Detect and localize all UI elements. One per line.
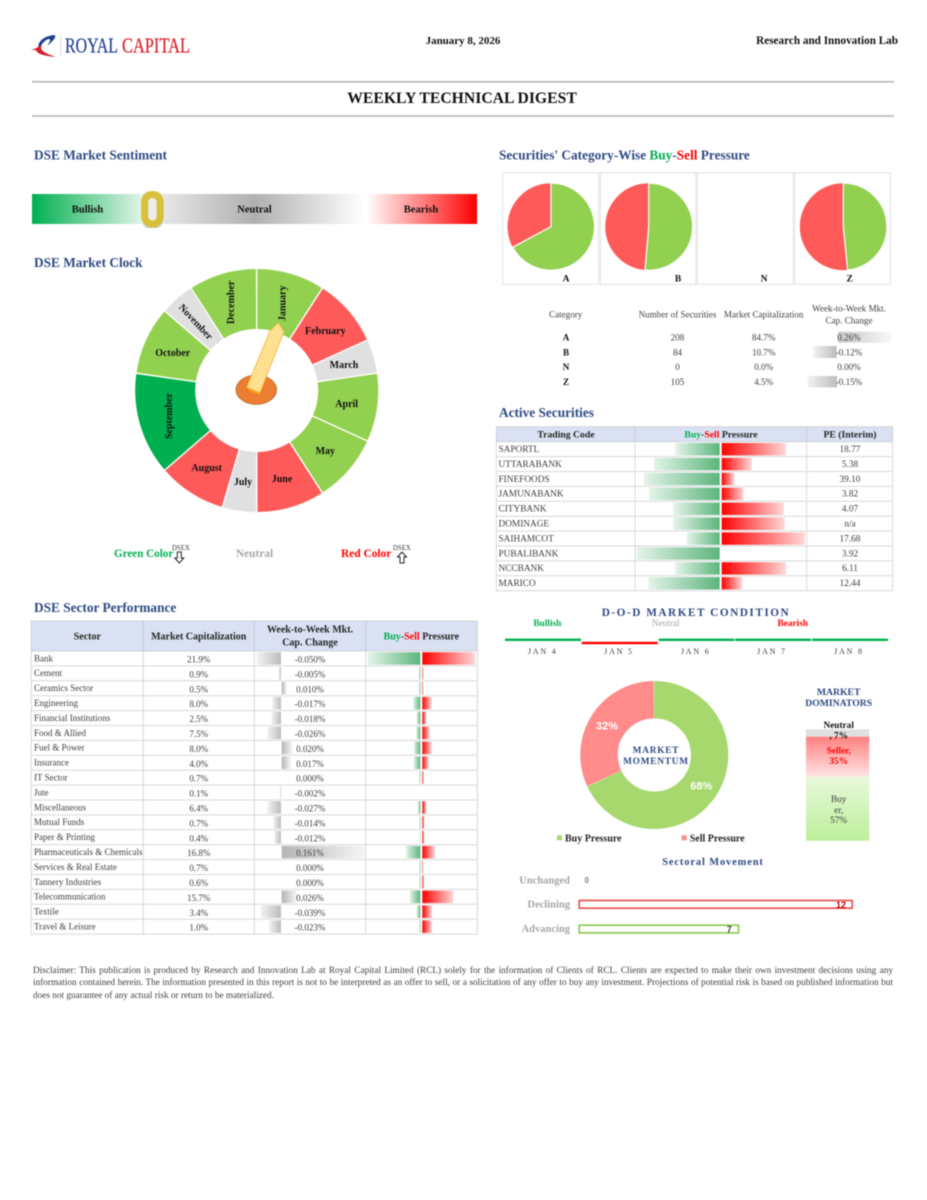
row: UTTARABANK: [498, 458, 858, 470]
month: June: June: [272, 474, 293, 485]
row: Pharmaceuticals & Chemicals: Pharmaceuticals & Chemicals: [34, 847, 143, 857]
month: April: April: [335, 399, 358, 410]
clock hub: [236, 375, 277, 404]
row: MARICO: [498, 577, 861, 590]
chart: market dominators stack: [806, 721, 869, 841]
row: Services & Real Estate: 0.7%: [189, 863, 209, 873]
row: Tannery Industries: Tannery Industries: [34, 877, 102, 887]
row: Miscellaneous: [34, 801, 426, 814]
icon: down arrow: [175, 552, 184, 563]
row: DOMINAGE: n/a: [844, 520, 856, 530]
row: JAMUNABANK: [498, 488, 858, 500]
chart: sectoral movement: 0: [584, 876, 589, 885]
row: Textile: -0.039%: [295, 908, 326, 918]
timeline: day-on-day condition: Neutral: [652, 619, 680, 629]
disclaimer: [32, 965, 894, 1001]
row: Bank: 21.9%: [187, 654, 211, 664]
row: Bank: Bank: [34, 653, 53, 663]
chart: market clock: [135, 268, 378, 514]
month: April: [165, 299, 358, 482]
disclaimer: information contained herein. The information presented in this report is not to be interpreted as an offer to sell, or a solicitation of any offer to buy any investment. Projections of potential risk is based on published information but: [33, 978, 893, 988]
row: Tannery Industries: 0.6%: [189, 878, 209, 888]
row: Mutual Funds: -0.014%: [295, 818, 326, 828]
row: Insurance: [34, 756, 429, 769]
table: active securities: [496, 427, 893, 591]
legend: clock colours: [114, 545, 411, 563]
month: October: [155, 299, 348, 482]
table: active securities: PE (Interim): [824, 430, 876, 440]
row: IT Sector: IT Sector: [34, 772, 68, 782]
heading: market dominators: DOMINATORS: [805, 698, 872, 709]
row: CITYBANK: CITYBANK: [498, 505, 547, 515]
month: June: [165, 299, 348, 485]
logo: Royal Capital: [31, 34, 190, 58]
table: category summary: 0.00%: [837, 362, 861, 372]
row: SAPORTL: [498, 443, 861, 455]
chart: market dominators stack: 35%: [829, 757, 848, 767]
heading: DSE Market Sentiment: DSE Market Sentiment: [34, 148, 168, 162]
month: March: March: [330, 360, 359, 371]
table: sector performance: Week-to-Week Mkt.: [267, 624, 354, 636]
legend: clock colours: DSEX: [393, 545, 411, 552]
bar: advancing: 7: [727, 924, 732, 934]
row: Financial Institutions: 2.5%: [189, 714, 209, 724]
chart: market dominators stack: , 7%: [829, 732, 848, 742]
timeline: day-on-day condition: Bullish: [533, 619, 562, 629]
row: Telecommunication: Telecommunication: [34, 892, 106, 902]
timeline: day-on-day condition: JAN 6: [681, 647, 711, 656]
row: FINEFOODS: [498, 473, 861, 485]
disclaimer: does not guarantee of any actual risk or return to be materialized.: [33, 990, 274, 1000]
table: sector performance: Cap. Change: [282, 638, 338, 648]
timeline: day-on-day condition: [505, 619, 888, 656]
sentiment gauge: Bearish: [404, 204, 438, 216]
row: Fuel & Power: [34, 742, 432, 754]
timeline: day-on-day condition: Bearish: [777, 619, 809, 629]
row: Miscellaneous: 6.4%: [189, 804, 209, 814]
row: Jute: -0.002%: [295, 789, 326, 799]
row: Food & Allied: -0.026%: [295, 729, 326, 739]
row: Ceramics Sector: 0.5%: [189, 684, 209, 694]
row: Textile: Textile: [34, 907, 59, 917]
logo: Royal Capital: CAPITAL: [122, 34, 190, 58]
row: PUBALIBANK: PUBALIBANK: [498, 549, 559, 559]
row: PUBALIBANK: [498, 547, 858, 560]
table: category summary: 0.26%: [837, 332, 861, 342]
row: Mutual Funds: [34, 816, 424, 829]
sentiment gauge: Bullish: [72, 204, 103, 216]
month: September: September: [164, 392, 175, 439]
row: CITYBANK: [498, 503, 858, 515]
row: Pharmaceuticals & Chemicals: 16.8%: [187, 848, 211, 858]
disclaimer: Disclaimer: This publication is produced by Research and Innovation Lab at Royal Capital Limited (RCL) solely for the information of Clients of RCL. Clients are expected to make their own investment decisions using any: [33, 966, 893, 976]
row: FINEFOODS: 39.10: [840, 475, 861, 485]
row: Telecommunication: 15.7%: [187, 893, 211, 903]
table: category summary: 84.7%: [752, 332, 776, 342]
row: Bank: [34, 652, 475, 665]
chart: market dominators stack: 57%: [830, 816, 847, 826]
row: Textile: 3.4%: [189, 908, 209, 918]
month: December: December: [226, 280, 237, 324]
pie Z: [795, 173, 890, 284]
table: active securities: Buy-Sell Pressure: [684, 430, 758, 440]
row: Paper & Printing: [34, 831, 424, 844]
row: Insurance: 0.017%: [296, 759, 324, 769]
chart: sectoral movement: Sectoral Movement: [662, 857, 764, 868]
row: Engineering: Engineering: [34, 698, 78, 708]
table: category summary: 0: [675, 362, 680, 372]
lab name: Research and Innovation Lab: [756, 35, 898, 47]
month: November: November: [176, 302, 215, 343]
table: category summary: 4.5%: [754, 377, 774, 387]
row: JAMUNABANK: 3.82: [842, 490, 858, 500]
row: SAIHAMCOT: [498, 532, 861, 545]
row: PUBALIBANK: 3.92: [842, 549, 858, 559]
table: sector performance: Buy-Sell Pressure: [384, 632, 460, 642]
row: Travel & Leisure: Travel & Leisure: [34, 922, 96, 932]
row: DOMINAGE: [498, 518, 856, 530]
month: March: [165, 299, 359, 482]
row: SAIHAMCOT: 17.68: [840, 534, 861, 544]
row: Fuel & Power: 8.0%: [189, 744, 209, 754]
table: active securities: Trading Code: [537, 430, 595, 440]
row: FINEFOODS: FINEFOODS: [498, 475, 550, 485]
row: Miscellaneous: -0.027%: [295, 804, 326, 814]
row: Telecommunication: [34, 891, 453, 903]
sentiment gauge: [32, 194, 477, 225]
row: Food & Allied: Food & Allied: [34, 728, 87, 738]
chart: market momentum donut: MARKET: [633, 746, 679, 756]
pie Z: Z: [847, 274, 853, 284]
icon: up arrow: [398, 552, 406, 563]
table: category summary: 0.0%: [754, 362, 774, 372]
chart: sectoral movement: Advancing: [522, 924, 571, 935]
row: Ceramics Sector: 0.010%: [296, 684, 324, 694]
row: DOMINAGE: DOMINAGE: [498, 520, 549, 530]
row: UTTARABANK: UTTARABANK: [498, 460, 562, 470]
month: August: [165, 299, 348, 482]
timeline: day-on-day condition: JAN 5: [604, 647, 634, 656]
row: Paper & Printing: 0.4%: [189, 833, 209, 843]
chart: sectoral movement: Declining: [527, 900, 571, 910]
month: November: [165, 299, 348, 482]
row: Financial Institutions: -0.018%: [295, 714, 326, 724]
legend: momentum: Buy Pressure: [565, 834, 622, 844]
heading: DSE Market Clock: DSE Market Clock: [34, 255, 143, 270]
bar: advancing: [579, 924, 739, 934]
row: Food & Allied: 7.5%: [189, 729, 209, 739]
chart: market dominators stack: Buy: [831, 795, 847, 805]
table: category summary: 10.7%: [752, 347, 776, 357]
row: UTTARABANK: 5.38: [842, 460, 858, 470]
row: Jute: Jute: [34, 787, 49, 797]
table: sector performance: [31, 621, 477, 934]
row: Travel & Leisure: 1.0%: [189, 923, 209, 933]
table: category summary: 84: [673, 347, 682, 357]
month: July: July: [234, 477, 252, 488]
chart: sectoral movement: Unchanged: [519, 876, 570, 886]
row: Tannery Industries: 0.000%: [296, 878, 324, 888]
chart: market dominators stack: Neutral: [823, 721, 854, 731]
month: January: [165, 286, 348, 482]
table: category summary: Z: [563, 377, 569, 387]
table: category summary: Cap. Change: [826, 316, 872, 326]
month: December: [165, 280, 348, 482]
row: Jute: [34, 786, 326, 799]
row: Engineering: [34, 697, 432, 709]
legend: clock colours: DSEX: [172, 545, 190, 552]
row: Insurance: 4.0%: [189, 759, 209, 769]
month: May: May: [316, 446, 335, 457]
row: CITYBANK: 4.07: [842, 505, 858, 515]
chart: sectoral movement: [519, 857, 852, 935]
legend: momentum: Sell Pressure: [690, 834, 745, 844]
bar: declining: 12: [836, 900, 846, 910]
table: category summary: N: [563, 362, 570, 372]
row: Tannery Industries: [34, 876, 424, 888]
row: Pharmaceuticals & Chemicals: [34, 846, 435, 858]
logo: Royal Capital: ROYAL: [65, 34, 118, 58]
row: Pharmaceuticals & Chemicals: 0.161%: [296, 848, 324, 858]
pie N: [697, 173, 793, 284]
table: sector performance: Sector: [74, 632, 101, 642]
table: category summary: Market Capitalization: [724, 310, 804, 320]
row: Paper & Printing: -0.012%: [295, 833, 326, 843]
row: Services & Real Estate: 0.000%: [296, 863, 324, 873]
row: Financial Institutions: Financial Institutions: [34, 713, 111, 723]
month: August: August: [191, 463, 223, 474]
legend: clock colours: Red Color: [341, 548, 391, 560]
row: Travel & Leisure: [34, 920, 432, 933]
sentiment gauge: Neutral: [237, 204, 272, 216]
month: February: [165, 299, 348, 482]
pie B: [600, 173, 696, 284]
title: WEEKLY TECHNICAL DIGEST: [347, 90, 577, 107]
row: Food & Allied: [34, 727, 430, 739]
row: Travel & Leisure: -0.023%: [295, 923, 326, 933]
month: February: February: [305, 326, 346, 337]
legend: clock colours: Neutral: [236, 548, 273, 560]
clock needle: [247, 323, 284, 394]
row: IT Sector: [34, 771, 424, 784]
chart: market dominators stack: er,: [834, 806, 843, 816]
row: Paper & Printing: Paper & Printing: [34, 832, 95, 842]
pie B: B: [675, 274, 682, 284]
table: sector performance: Market Capitalization: [151, 632, 247, 642]
pie N: N: [761, 274, 768, 284]
month: May: [165, 299, 348, 482]
chart: market momentum donut: MOMENTUM: [623, 757, 689, 767]
row: NCCBANK: [498, 562, 858, 575]
row: Insurance: Insurance: [34, 758, 69, 768]
heading: DSE Sector Performance: DSE Sector Performance: [34, 600, 176, 615]
row: JAMUNABANK: JAMUNABANK: [498, 490, 564, 500]
table: category summary: Week-to-Week Mkt.: [812, 304, 886, 314]
row: Bank: -0.050%: [295, 654, 326, 664]
row: Cement: Cement: [34, 668, 62, 678]
bar: declining: [579, 900, 852, 910]
row: Cement: [34, 667, 423, 680]
timeline: day-on-day condition: JAN 7: [757, 647, 787, 656]
row: SAPORTL: SAPORTL: [498, 445, 540, 455]
table: category summary: [549, 304, 892, 387]
row: Services & Real Estate: [34, 861, 423, 873]
row: Mutual Funds: 0.7%: [189, 818, 209, 828]
pie A: [503, 173, 599, 284]
chart: market dominators stack: Seller,: [827, 746, 851, 756]
legend: momentum: [557, 834, 745, 844]
table: category summary: 208: [671, 332, 685, 342]
row: IT Sector: 0.000%: [296, 774, 324, 784]
table: category summary: 105: [671, 377, 685, 387]
row: Cement: -0.005%: [295, 669, 326, 679]
row: NCCBANK: NCCBANK: [498, 564, 544, 574]
row: Services & Real Estate: Services & Real Estate: [34, 862, 117, 872]
heading: Active Securities: Active Securities: [499, 405, 594, 420]
chart: market momentum donut: 32%: [596, 720, 618, 732]
row: Engineering: -0.017%: [295, 699, 326, 709]
row: SAIHAMCOT: SAIHAMCOT: [498, 534, 554, 544]
date: January 8, 2026: [426, 35, 501, 47]
row: SAPORTL: 18.77: [840, 445, 861, 455]
row: Engineering: 8.0%: [189, 699, 209, 709]
table: category summary: Number of Securities: [639, 310, 717, 320]
timeline: day-on-day condition: JAN 4: [528, 647, 558, 656]
heading: market dominators: MARKET: [817, 687, 861, 698]
row: IT Sector: 0.7%: [189, 774, 209, 784]
row: Ceramics Sector: [34, 682, 423, 694]
heading: category-wise pressure: Securities' Category-Wise Buy-Sell Pressure: [499, 148, 750, 162]
row: Fuel & Power: 0.020%: [296, 744, 324, 754]
row: Telecommunication: 0.026%: [296, 893, 324, 903]
table: category summary: -0.15%: [836, 377, 863, 387]
row: Mutual Funds: Mutual Funds: [34, 817, 85, 827]
row: MARICO: 12.44: [840, 579, 861, 589]
legend: clock colours: Green Color: [114, 548, 173, 560]
chart: market momentum donut: [596, 700, 713, 810]
month: July: [165, 299, 348, 488]
table: category summary: Category: [549, 310, 583, 320]
row: Ceramics Sector: Ceramics Sector: [34, 683, 93, 693]
row: Cement: 0.9%: [189, 669, 209, 679]
month: October: October: [155, 348, 191, 359]
row: Miscellaneous: Miscellaneous: [34, 802, 86, 812]
table: category summary: -0.12%: [836, 347, 863, 357]
row: Financial Institutions: [34, 712, 426, 724]
heading: D-O-D market condition: D-O-D MARKET CONDITION: [602, 607, 790, 619]
table: category summary: A: [563, 332, 570, 342]
month: January: January: [278, 286, 288, 321]
row: NCCBANK: 6.11: [842, 564, 858, 574]
panel: category pies: [503, 173, 890, 284]
table: category summary: B: [563, 347, 569, 357]
heading: market dominators: [805, 687, 872, 709]
row: MARICO: MARICO: [498, 579, 536, 589]
row: Fuel & Power: Fuel & Power: [34, 743, 85, 753]
row: Jute: 0.1%: [189, 789, 209, 799]
pie A: A: [563, 274, 570, 284]
month: September: [164, 299, 348, 482]
row: Textile: [34, 906, 432, 918]
chart: market momentum donut: 68%: [690, 780, 713, 792]
timeline: day-on-day condition: JAN 8: [834, 647, 864, 656]
